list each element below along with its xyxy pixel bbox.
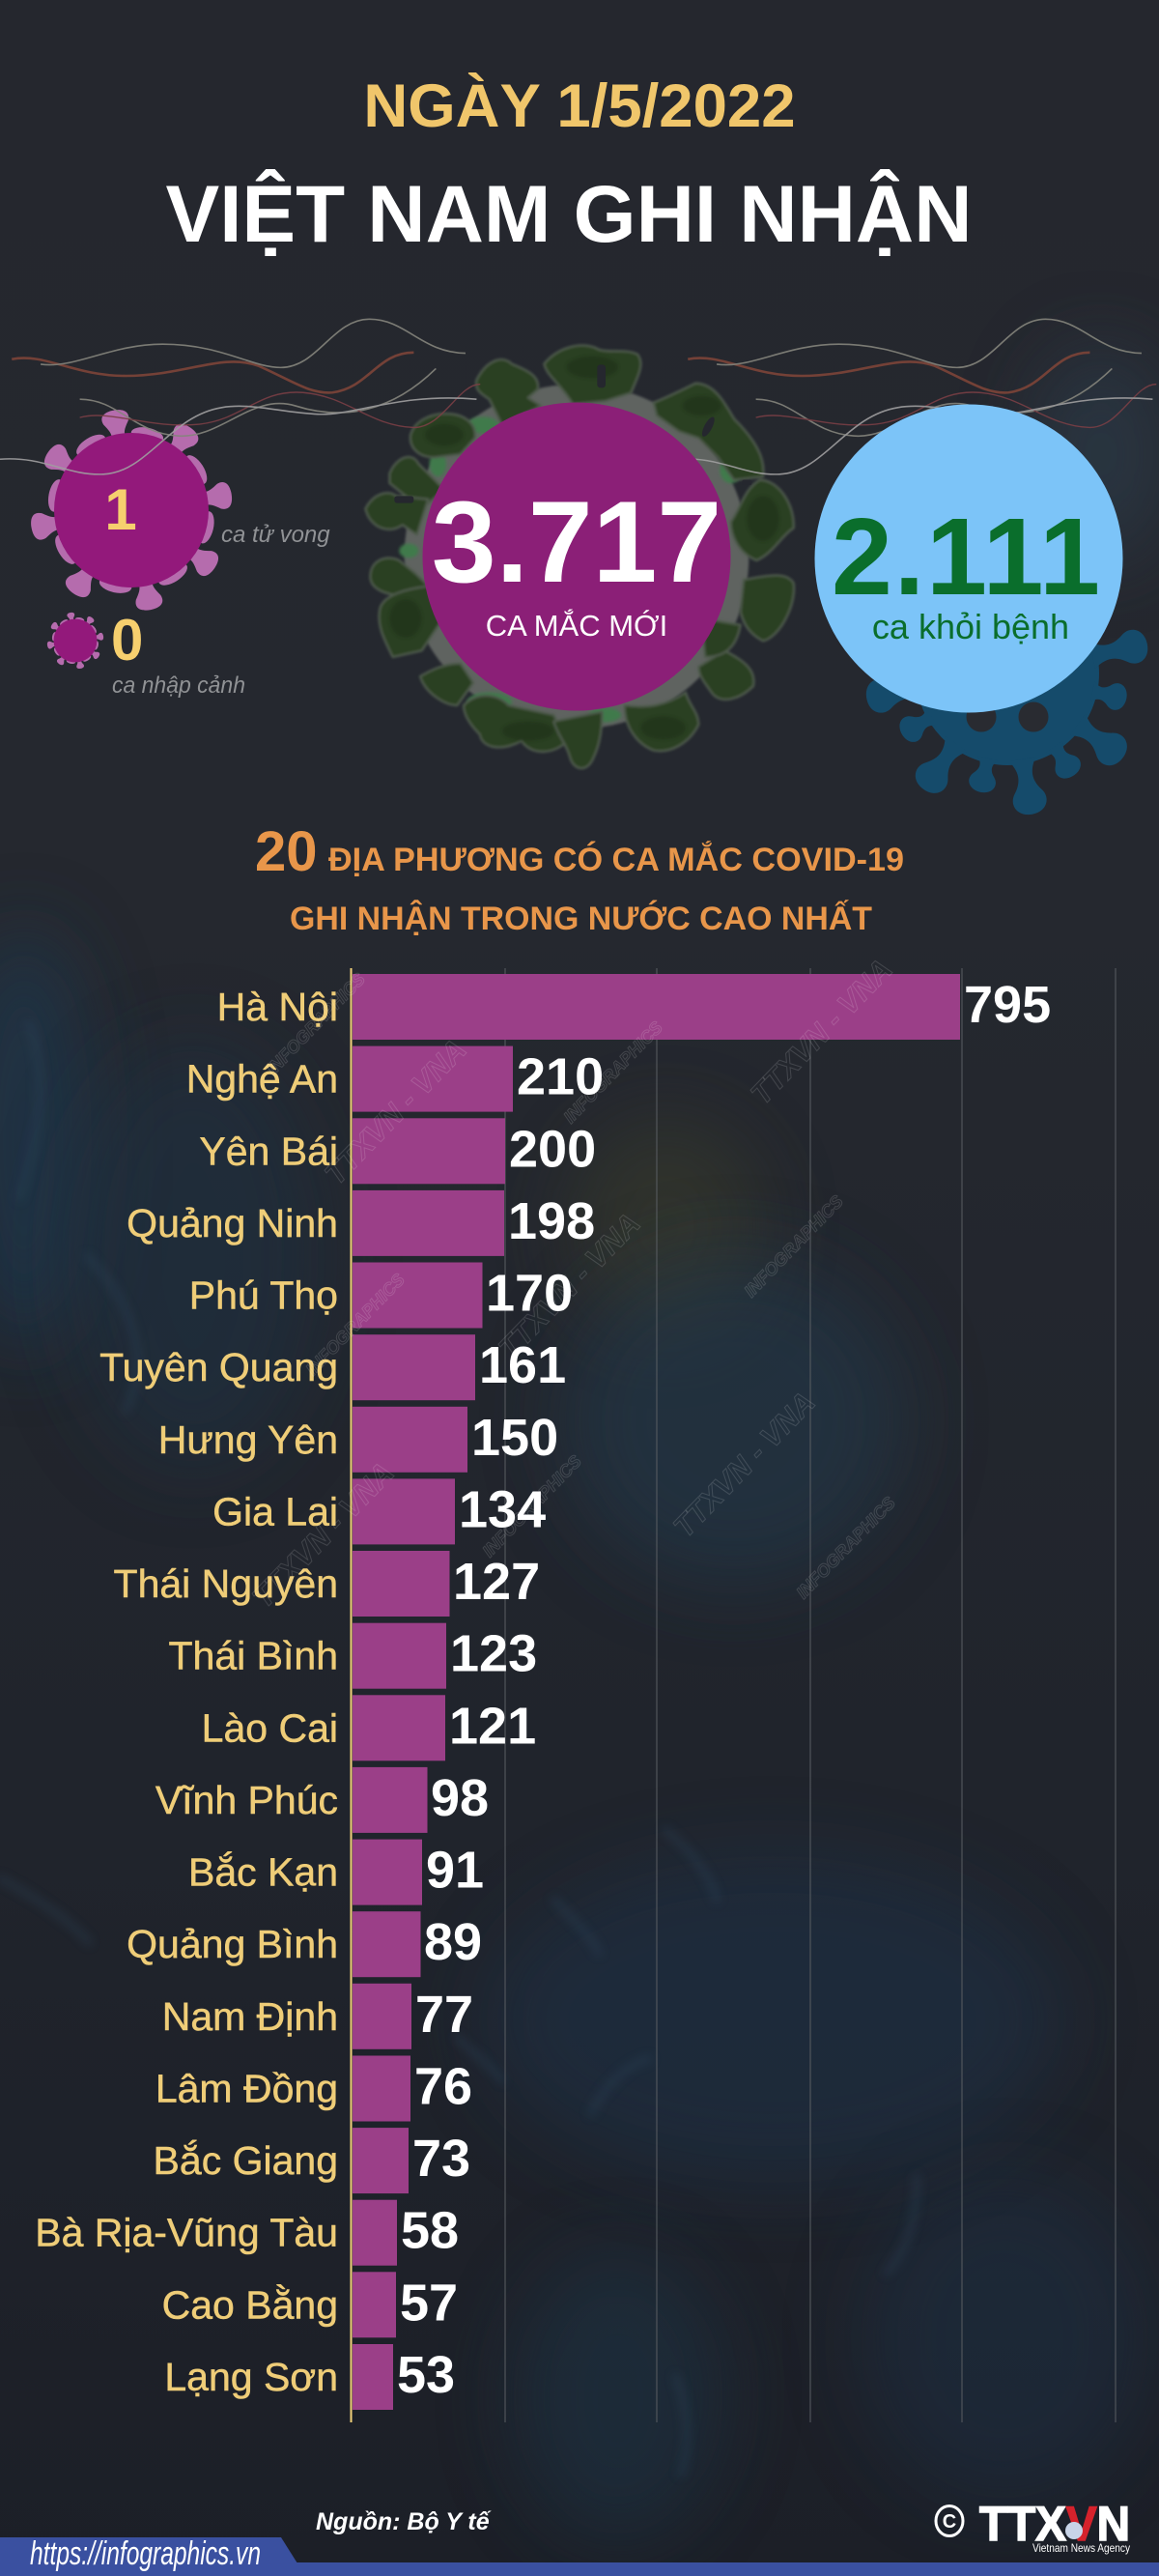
bar chart: 89 bbox=[424, 1913, 482, 1971]
wavy decorative lines bbox=[0, 319, 1156, 474]
bar chart: Quảng Bình bbox=[127, 1922, 338, 1966]
bar chart: 200 bbox=[509, 1120, 596, 1178]
watermarks: INFOGRAPHICS bbox=[263, 969, 369, 1078]
panel: recovered circle: ca khỏi bệnh bbox=[872, 607, 1069, 646]
logo: TTXVN: C bbox=[943, 2511, 956, 2533]
watermarks: TTXVN - VNA bbox=[744, 953, 899, 1111]
bar chart: Nam Định bbox=[162, 1994, 338, 2039]
bar chart bbox=[35, 968, 1116, 2422]
panel: new cases circle bbox=[423, 402, 730, 711]
icon: tiny virus, imported cases bbox=[46, 612, 104, 670]
bar chart: 210 bbox=[517, 1048, 604, 1106]
source: Nguồn: Bộ Y tế bbox=[316, 2508, 492, 2535]
bar chart: 121 bbox=[449, 1697, 536, 1755]
bar chart: 53 bbox=[397, 2346, 455, 2404]
bar chart: Thái Nguyên bbox=[114, 1561, 338, 1606]
logo: TTXVN: TTXVN bbox=[979, 2497, 1130, 2551]
stat: deaths: 1 bbox=[104, 477, 137, 542]
bar chart: 58 bbox=[401, 2202, 459, 2260]
stat: imported cases bbox=[111, 608, 245, 699]
title: NGÀY 1/5/2022 bbox=[363, 72, 796, 140]
bar chart: Vĩnh Phúc bbox=[155, 1778, 338, 1822]
bar chart: Yên Bái bbox=[199, 1129, 338, 1173]
bar chart: 76 bbox=[414, 2058, 472, 2116]
bar chart: 134 bbox=[459, 1480, 546, 1538]
bar chart: Bắc Giang bbox=[154, 2138, 338, 2183]
panel: recovered circle: 2.111 bbox=[832, 496, 1100, 617]
bar chart: Tuyên Quang bbox=[99, 1345, 338, 1389]
bar chart: Lạng Sơn bbox=[164, 2355, 338, 2399]
watermarks bbox=[245, 953, 899, 1615]
bar chart: Gia Lai bbox=[212, 1489, 338, 1533]
bar chart: Bà Rịa-Vũng Tàu bbox=[35, 2211, 338, 2255]
watermarks: INFOGRAPHICS bbox=[793, 1493, 899, 1602]
chart heading: ĐỊA PHƯƠNG CÓ CA MẮC COVID-19 bbox=[328, 840, 904, 878]
bar chart: 123 bbox=[450, 1625, 537, 1683]
watermarks: INFOGRAPHICS bbox=[302, 1270, 409, 1379]
bar chart: 198 bbox=[508, 1192, 595, 1250]
watermarks: TTXVN - VNA bbox=[318, 1033, 473, 1191]
bar chart: Thái Bình bbox=[168, 1634, 338, 1678]
bar chart: Bắc Kạn bbox=[188, 1850, 338, 1895]
bar chart: 57 bbox=[400, 2274, 458, 2332]
stat: imported cases: ca nhập cảnh bbox=[112, 673, 245, 699]
bar chart: 91 bbox=[426, 1842, 484, 1900]
panel: new cases circle: CA MẮC MỚI bbox=[486, 608, 667, 643]
chart heading: GHI NHẬN TRONG NƯỚC CAO NHẤT bbox=[290, 901, 872, 937]
watermarks: TTXVN - VNA bbox=[666, 1386, 822, 1544]
stat: imported cases: 0 bbox=[111, 608, 143, 673]
bar chart: Cao Bằng bbox=[162, 2282, 338, 2327]
bar chart: 161 bbox=[479, 1336, 566, 1394]
watermarks: TTXVN - VNA bbox=[492, 1207, 647, 1365]
bar chart: Lâm Đồng bbox=[155, 2066, 338, 2110]
bar chart: Hưng Yên bbox=[158, 1417, 338, 1462]
icon: small virus, deaths bbox=[29, 408, 234, 613]
chart heading: 20 bbox=[255, 820, 318, 883]
title: VIỆT NAM GHI NHẬN bbox=[166, 168, 972, 259]
stat: deaths bbox=[104, 477, 330, 548]
bar chart: Nghệ An bbox=[186, 1057, 338, 1102]
bar chart: Lào Cai bbox=[202, 1705, 338, 1750]
logo: TTXVN: Vietnam News Agency bbox=[1032, 2541, 1130, 2555]
panel: recovered circle bbox=[815, 404, 1122, 713]
bar chart: 795 bbox=[964, 976, 1051, 1034]
panel: new cases circle: 3.717 bbox=[432, 477, 721, 607]
footer bar: https://infographics.vn bbox=[30, 2535, 261, 2572]
bar chart: 150 bbox=[471, 1409, 558, 1467]
watermarks: TTXVN - VNA bbox=[245, 1456, 401, 1615]
bar chart: Quảng Ninh bbox=[127, 1201, 338, 1245]
icon: blue coronavirus bbox=[863, 582, 1150, 817]
bar chart: Phú Thọ bbox=[189, 1274, 338, 1318]
bar chart: 98 bbox=[431, 1769, 489, 1827]
watermarks: INFOGRAPHICS bbox=[479, 1451, 585, 1560]
title bbox=[166, 72, 972, 259]
watermarks: INFOGRAPHICS bbox=[741, 1191, 847, 1301]
stat: deaths: ca tử vong bbox=[221, 522, 330, 548]
icon: green coronavirus bbox=[365, 345, 794, 768]
footer bar bbox=[0, 2535, 1159, 2576]
bar chart: Hà Nội bbox=[217, 985, 338, 1029]
bar chart: 73 bbox=[412, 2130, 470, 2188]
bar chart: 170 bbox=[486, 1264, 573, 1322]
chart heading bbox=[255, 820, 904, 937]
bar chart: 127 bbox=[453, 1553, 540, 1611]
bar chart: 77 bbox=[415, 1986, 473, 2044]
watermarks: INFOGRAPHICS bbox=[560, 1017, 666, 1127]
